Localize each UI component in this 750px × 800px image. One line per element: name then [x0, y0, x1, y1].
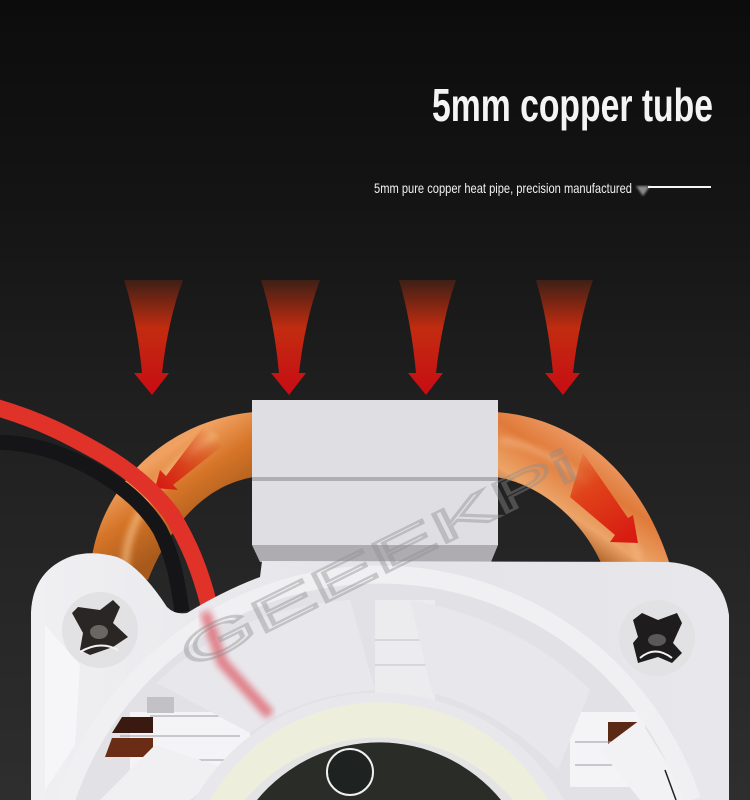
heatsink fins	[105, 600, 645, 787]
ring dark edge	[665, 770, 676, 800]
arrow 2	[261, 280, 320, 395]
flow arrow right	[570, 453, 638, 543]
fan frame	[25, 545, 735, 800]
arrow 4	[536, 280, 593, 395]
black wire	[0, 442, 182, 612]
arrow 3	[399, 280, 456, 395]
screw left	[62, 592, 138, 668]
outer ring	[66, 575, 692, 800]
red wire	[0, 407, 209, 605]
watermark: GEEEKPi	[171, 439, 585, 679]
red wire seen through frame	[205, 612, 270, 715]
wires	[0, 407, 209, 612]
frame struts	[45, 625, 80, 790]
arrow 1	[124, 280, 183, 395]
heat arrows	[124, 280, 593, 395]
copper pipe left	[92, 412, 254, 580]
subtitle: 5mm pure copper heat pipe, precision manufactured	[374, 180, 632, 196]
fan blades	[100, 640, 682, 800]
flow arrow left	[155, 426, 222, 490]
screw right	[619, 600, 695, 676]
hub	[210, 702, 548, 800]
fan	[25, 545, 735, 800]
copper pipe right	[496, 412, 670, 565]
ring interior	[76, 639, 201, 800]
leader line	[636, 186, 711, 196]
aluminium block	[252, 400, 498, 562]
